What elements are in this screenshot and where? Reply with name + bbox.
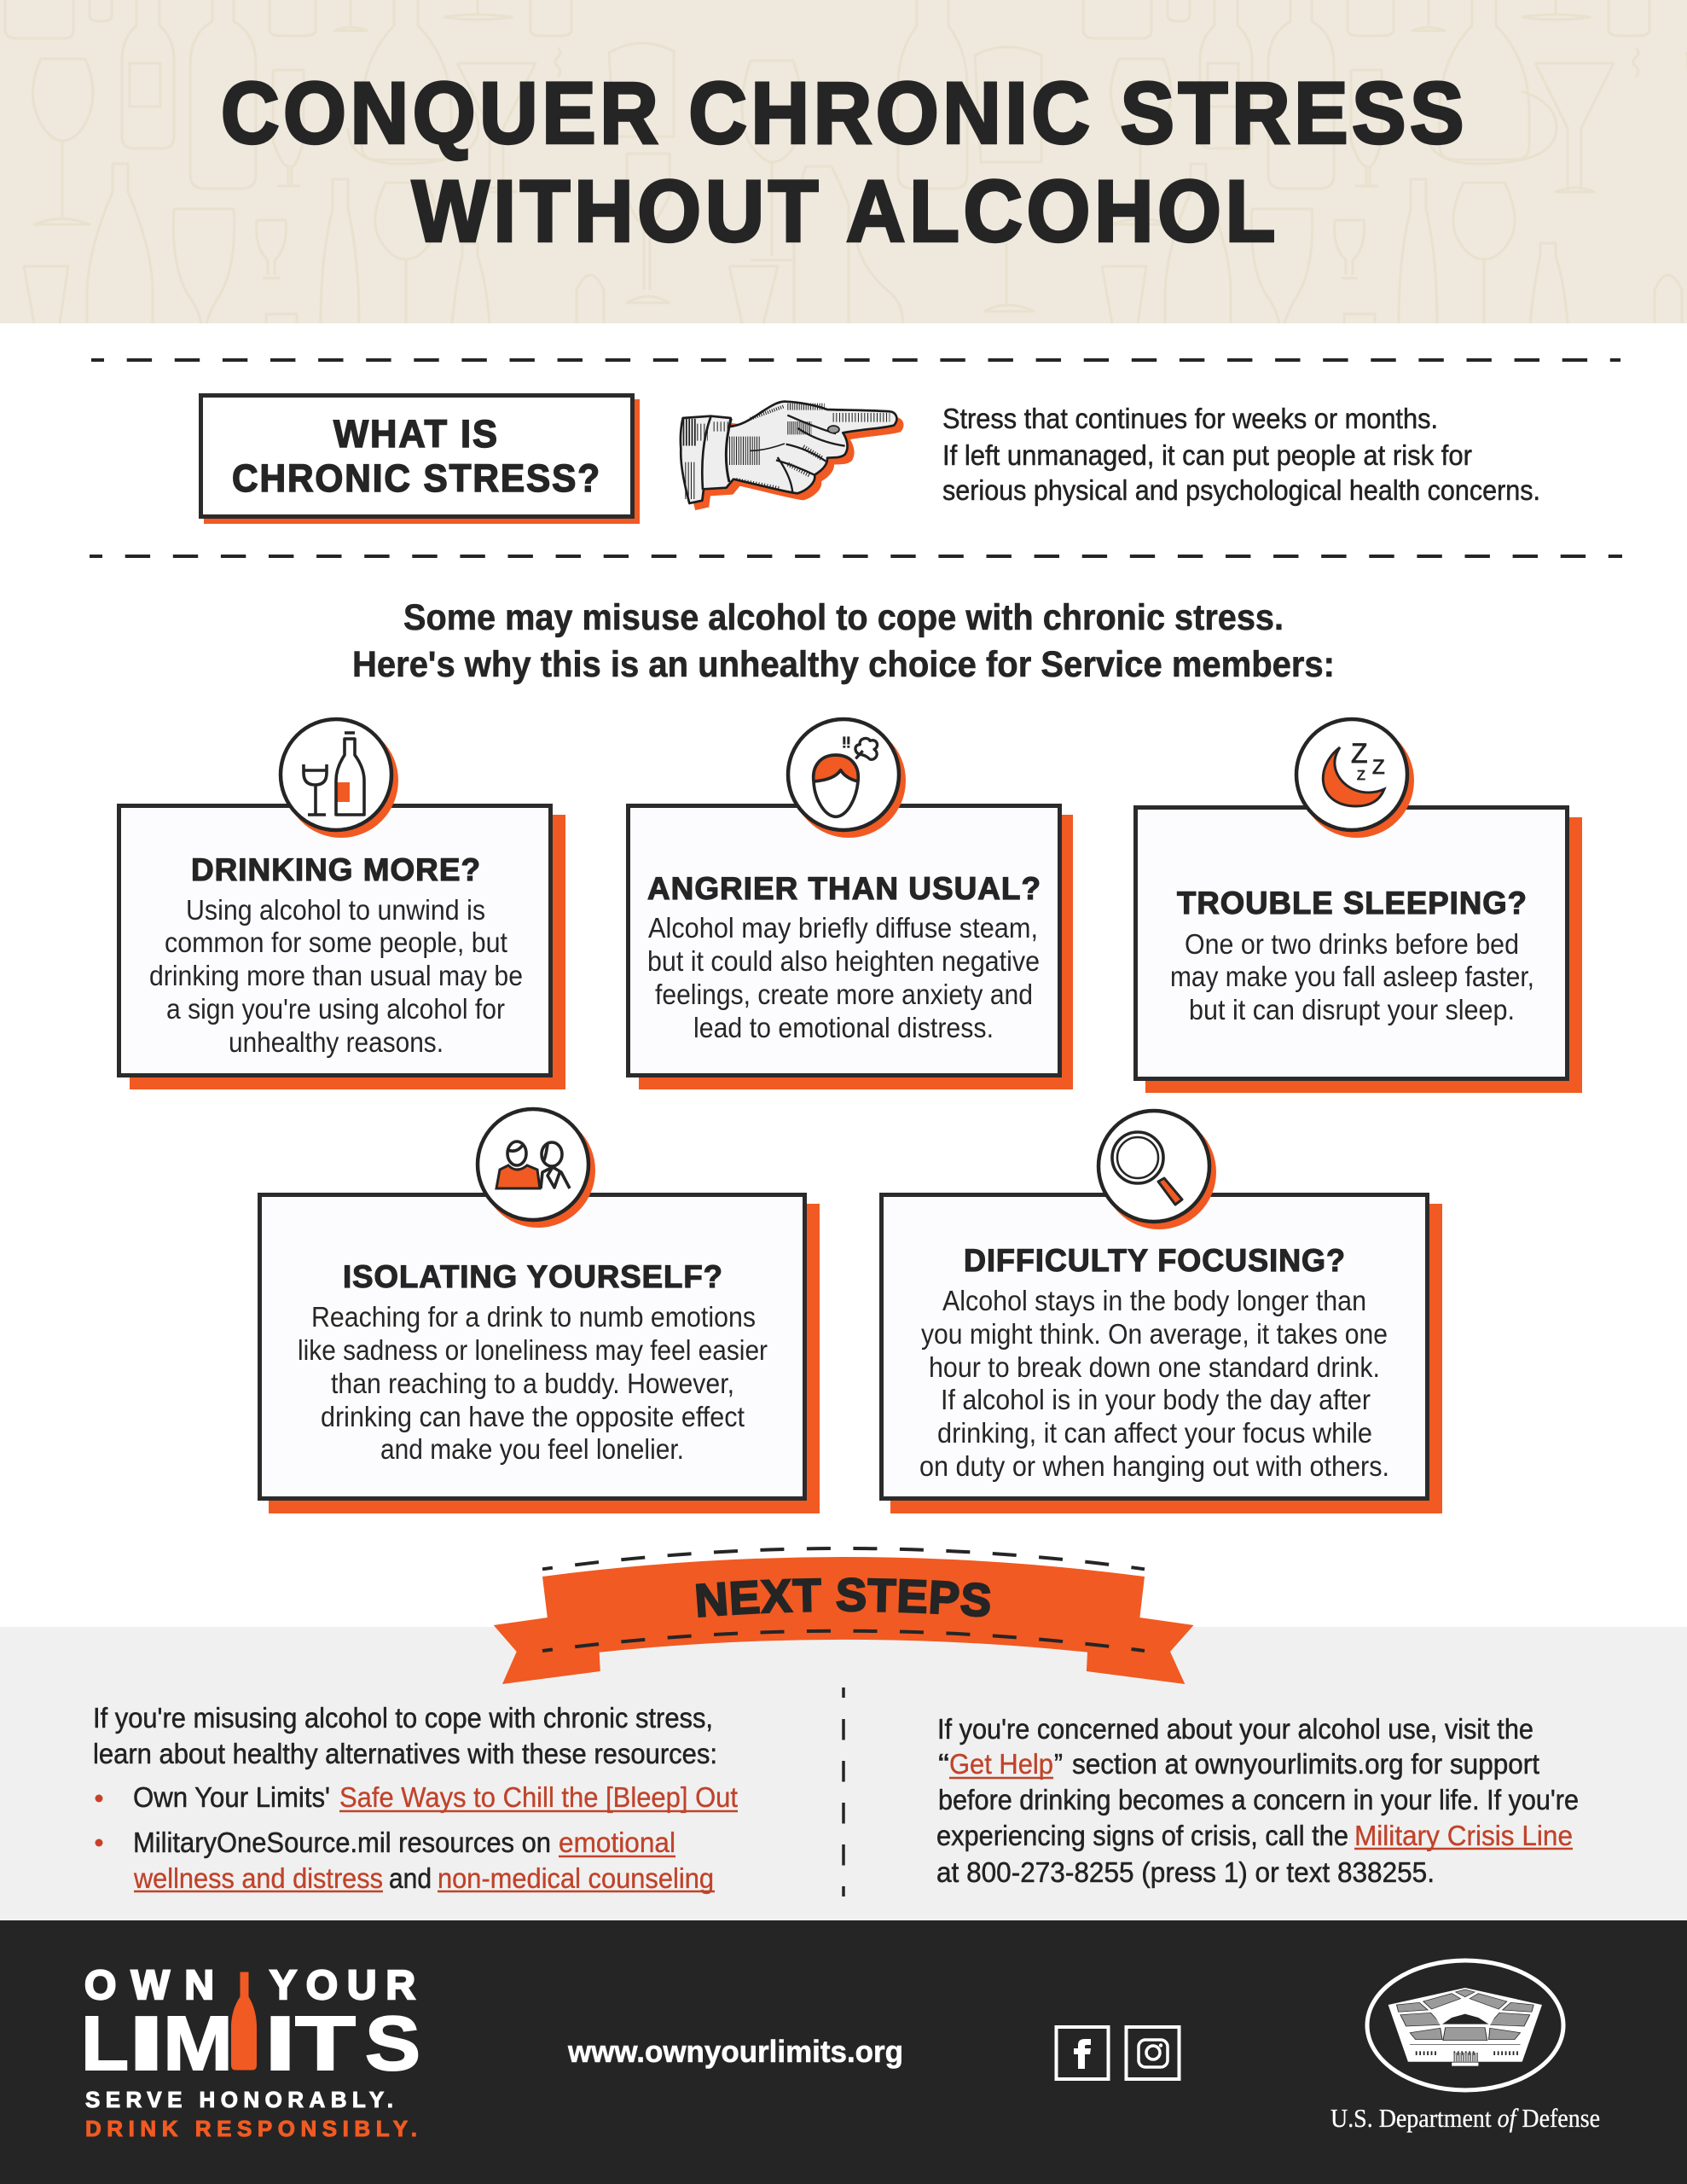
text: difficulty focusing body (919, 1285, 1389, 1482)
logo: own your limits: SERVE HONORABLY. (85, 2087, 393, 2112)
text block: healthy alternatives resources: non-medical counseling (438, 1862, 714, 1894)
text block: healthy alternatives resources (93, 1702, 738, 1894)
callout: what is chronic stress box: WHAT IS (333, 412, 499, 456)
text: drinking more body: Using alcohol to unwind is (186, 894, 485, 926)
text block: get help and crisis line: at 800-273-8255 (press 1) or text 838255. (936, 1856, 1435, 1888)
text: trouble sleeping body: but it can disrupt your sleep. (1189, 994, 1515, 1025)
text: angrier than usual body: feelings, create more anxiety and (655, 979, 1033, 1010)
heading: why this is unhealthy (352, 597, 1335, 685)
text: difficulty focusing body: hour to break down one standard drink. (929, 1351, 1380, 1383)
panel: angrier than usual: ANGRIER THAN USUAL? (647, 871, 1041, 906)
text: drinking more body (149, 894, 523, 1058)
banner: next steps ribbon (493, 1547, 1194, 1684)
panel: next steps background (0, 1627, 1687, 1921)
text: difficulty focusing body: If alcohol is in your body the day after (941, 1384, 1371, 1415)
text block: healthy alternatives resources: emotional (559, 1827, 675, 1858)
text: angrier than usual body (647, 912, 1040, 1043)
text block: chronic stress definition (942, 403, 1540, 506)
text block: healthy alternatives resources: Safe Ways to Chill the [Bleep] Out (339, 1781, 738, 1813)
panel: drinking more (119, 719, 565, 1089)
icon: crescent moon with Z letters: Z (1372, 756, 1385, 779)
text block: healthy alternatives resources: If you're misusing alcohol to cope with chronic stress, (93, 1702, 713, 1734)
text block: get help and crisis line: section at ownyourlimits.org for support (1072, 1748, 1539, 1780)
text: difficulty focusing body: Alcohol stays in the body longer than (942, 1285, 1366, 1316)
text: drinking more body: a sign you're using alcohol for (166, 993, 505, 1025)
title: CONQUER CHRONIC STRESS (221, 65, 1468, 162)
text block: get help and crisis line (936, 1713, 1579, 1888)
text block: get help and crisis line: experiencing signs of crisis, call the (936, 1820, 1348, 1851)
logo: own your limits (81, 1963, 420, 2141)
text: angrier than usual body: Alcohol may briefly diffuse steam, (648, 912, 1038, 944)
text block: healthy alternatives resources: learn about healthy alternatives with these resources: (93, 1738, 717, 1769)
icon: angry face with steam (814, 736, 878, 816)
icon: crescent moon with Z letters (1323, 738, 1385, 806)
callout: what is chronic stress box (201, 396, 640, 524)
heading: why this is unhealthy: Some may misuse alcohol to cope with chronic stress. (403, 597, 1284, 638)
text: drinking more body: unhealthy reasons. (229, 1026, 443, 1058)
text: trouble sleeping body (1170, 928, 1534, 1025)
icon: pointing hand (681, 402, 903, 509)
logo: own your limits: L (81, 2001, 129, 2087)
text block: healthy alternatives resources: MilitaryOneSource.mil resources on (133, 1827, 551, 1858)
text: angrier than usual body: lead to emotional distress. (693, 1012, 994, 1043)
text: drinking more body: common for some people, but (165, 926, 507, 958)
logo: own your limits: YOUR (270, 1963, 415, 2008)
panel: angrier than usual (628, 719, 1073, 1089)
panel: isolating yourself (259, 1109, 820, 1513)
logo: own your limits: M (163, 2001, 233, 2087)
logo: own your limits: S (365, 2001, 420, 2087)
text block: get help and crisis line: Military Crisis Line (1354, 1820, 1573, 1851)
text: isolating yourself body: and make you feel lonelier. (380, 1433, 684, 1465)
icon: facebook (1056, 2027, 1109, 2079)
text block: chronic stress definition: Stress that continues for weeks or months. (942, 403, 1438, 434)
text: isolating yourself body (298, 1301, 768, 1465)
text block: get help and crisis line: “ (938, 1748, 949, 1780)
text block: chronic stress definition: serious physical and psychological health concerns. (942, 474, 1540, 506)
icon: instagram (1126, 2027, 1179, 2079)
icon: orange bottle (230, 1971, 258, 2071)
panel: difficulty focusing (882, 1111, 1442, 1513)
logo: own your limits: T (295, 2001, 356, 2087)
panel: trouble sleeping: TROUBLE SLEEPING? (1177, 886, 1528, 921)
panel: trouble sleeping (1136, 719, 1582, 1093)
bottle and glass background pattern (5, 0, 1687, 323)
text: isolating yourself body: Reaching for a drink to numb emotions (311, 1301, 756, 1333)
banner: next steps ribbon: NEXT STEPS (696, 1577, 991, 1618)
text block: get help and crisis line: before drinking becomes a concern in your life. If you're (938, 1784, 1579, 1815)
icon: two people (496, 1141, 570, 1188)
text: isolating yourself body: like sadness or loneliness may feel easier (298, 1334, 768, 1366)
text block: healthy alternatives resources: and (389, 1862, 432, 1894)
text: difficulty focusing body: drinking, it can affect your focus while (937, 1417, 1372, 1449)
text: isolating yourself body: than reaching to a buddy. However, (331, 1368, 734, 1399)
logo: own your limits: I (128, 2001, 165, 2087)
text: difficulty focusing body: on duty or when hanging out with others. (919, 1450, 1389, 1482)
callout: what is chronic stress box: CHRONIC STRESS? (232, 456, 601, 500)
icon: wine glass and bottle (304, 733, 364, 815)
footer (0, 1920, 1687, 2184)
header banner (0, 0, 1687, 323)
title: WITHOUT ALCOHOL (412, 162, 1279, 259)
text block: chronic stress definition: If left unmanaged, it can put people at risk for (942, 439, 1472, 471)
panel: difficulty focusing: DIFFICULTY FOCUSING? (964, 1243, 1346, 1278)
panel: drinking more: DRINKING MORE? (191, 852, 481, 887)
text block: get help and crisis line: If you're concerned about your alcohol use, visit the (937, 1713, 1533, 1745)
heading: why this is unhealthy: Here's why this is an unhealthy choice for Service members: (352, 644, 1335, 685)
department of defense wordmark: U.S. Department of Defense (1330, 2103, 1600, 2133)
text block: get help and crisis line: ” (1054, 1748, 1063, 1780)
title (221, 65, 1468, 259)
logo: own your limits: DRINK RESPONSIBLY. (85, 2116, 417, 2141)
text: difficulty focusing body: you might think. On average, it takes one (921, 1318, 1388, 1350)
icon: magnifying glass (1112, 1132, 1182, 1205)
text: trouble sleeping body: One or two drinks before bed (1185, 928, 1519, 960)
icon: crescent moon with Z letters: Z (1351, 738, 1368, 769)
logo: pentagon seal (1367, 1960, 1563, 2090)
text: angrier than usual body: but it could also heighten negative (647, 945, 1040, 977)
panel: isolating yourself: ISOLATING YOURSELF? (343, 1259, 723, 1294)
text: trouble sleeping body: may make you fall asleep faster, (1170, 961, 1534, 992)
website url: www.ownyourlimits.org (567, 2034, 903, 2069)
icon: crescent moon with Z letters: Z (1357, 769, 1365, 783)
text block: healthy alternatives resources: wellness and distress (133, 1862, 383, 1894)
logo: own your limits: I (264, 2001, 296, 2087)
text: drinking more body: drinking more than usual may be (149, 960, 523, 991)
text block: get help and crisis line: Get Help (949, 1748, 1053, 1780)
logo: own your limits: OWN (84, 1963, 214, 2008)
text block: healthy alternatives resources: Own Your Limits' (133, 1781, 330, 1813)
text: isolating yourself body: drinking can have the opposite effect (321, 1401, 745, 1432)
